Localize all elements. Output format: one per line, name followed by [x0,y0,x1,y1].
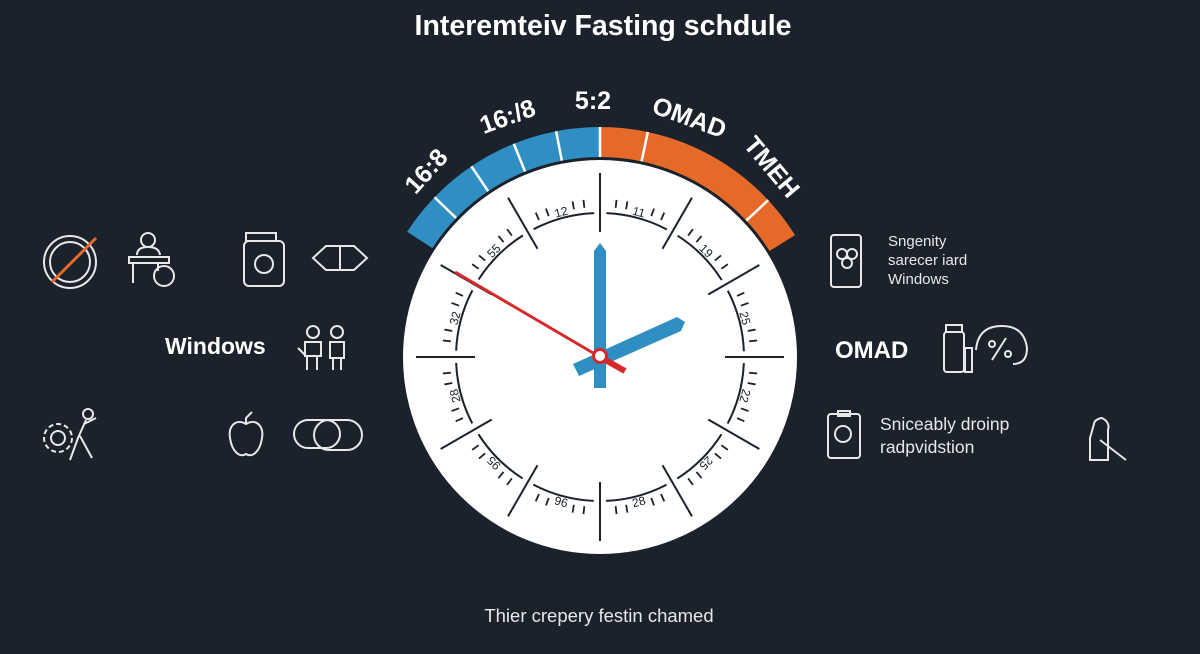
dial numbers: 12 [553,204,570,221]
icon: tablet coins [831,235,861,287]
dial numbers [447,204,753,510]
major ticks [416,173,784,541]
icon: bottle percent [944,325,1027,372]
arc labels: 16:8 [399,143,454,199]
label: OMAD: OMAD [835,337,908,364]
text: right top: sarecer iard [888,252,967,269]
text: right bottom: Sniceably droinp [880,414,1009,434]
icon: people [298,326,344,370]
dial numbers: 95 [484,453,504,473]
icon: diamond [313,246,367,270]
icon: apple [230,412,262,455]
arc labels: 5:2 [575,87,611,115]
clock face [403,160,797,554]
icon: clipboard [828,411,860,458]
dial numbers: 96 [553,493,570,510]
arc labels: OMAD [649,92,730,144]
dial numbers: 11 [631,204,647,221]
text: right top: Windows [888,271,949,288]
minor ticks [443,200,757,514]
icon: pills [294,420,362,450]
left icons [44,233,367,460]
icon: plate crossed [44,236,96,288]
dial numbers: 32 [447,310,464,326]
right icons [828,235,1126,460]
icon: gear runner [44,409,96,460]
label: Windows: Windows [165,333,266,359]
dial numbers: 55 [484,241,504,261]
arc labels: TMEH [738,131,805,203]
arc labels: 16:/8 [476,94,539,140]
dial numbers: 28 [447,387,464,404]
icon: bottle tool [1090,418,1126,460]
dial numbers: 28 [631,493,647,510]
clock hands [455,243,685,388]
arc labels [399,87,805,203]
footer text: Thier crepery festin chamed [484,605,714,626]
icon: person at desk [129,233,174,286]
title: Interemteiv Fasting schdule [415,10,791,42]
dial numbers: 22 [736,388,753,404]
dial numbers: 19 [696,241,716,261]
dial numbers: 25 [696,453,716,473]
dial numbers: 25 [736,310,753,327]
icon: jar [244,233,284,286]
schedule arc [407,127,795,251]
text: right top: Sngenity [888,233,947,250]
text: right bottom: radpvidstion [880,437,974,457]
